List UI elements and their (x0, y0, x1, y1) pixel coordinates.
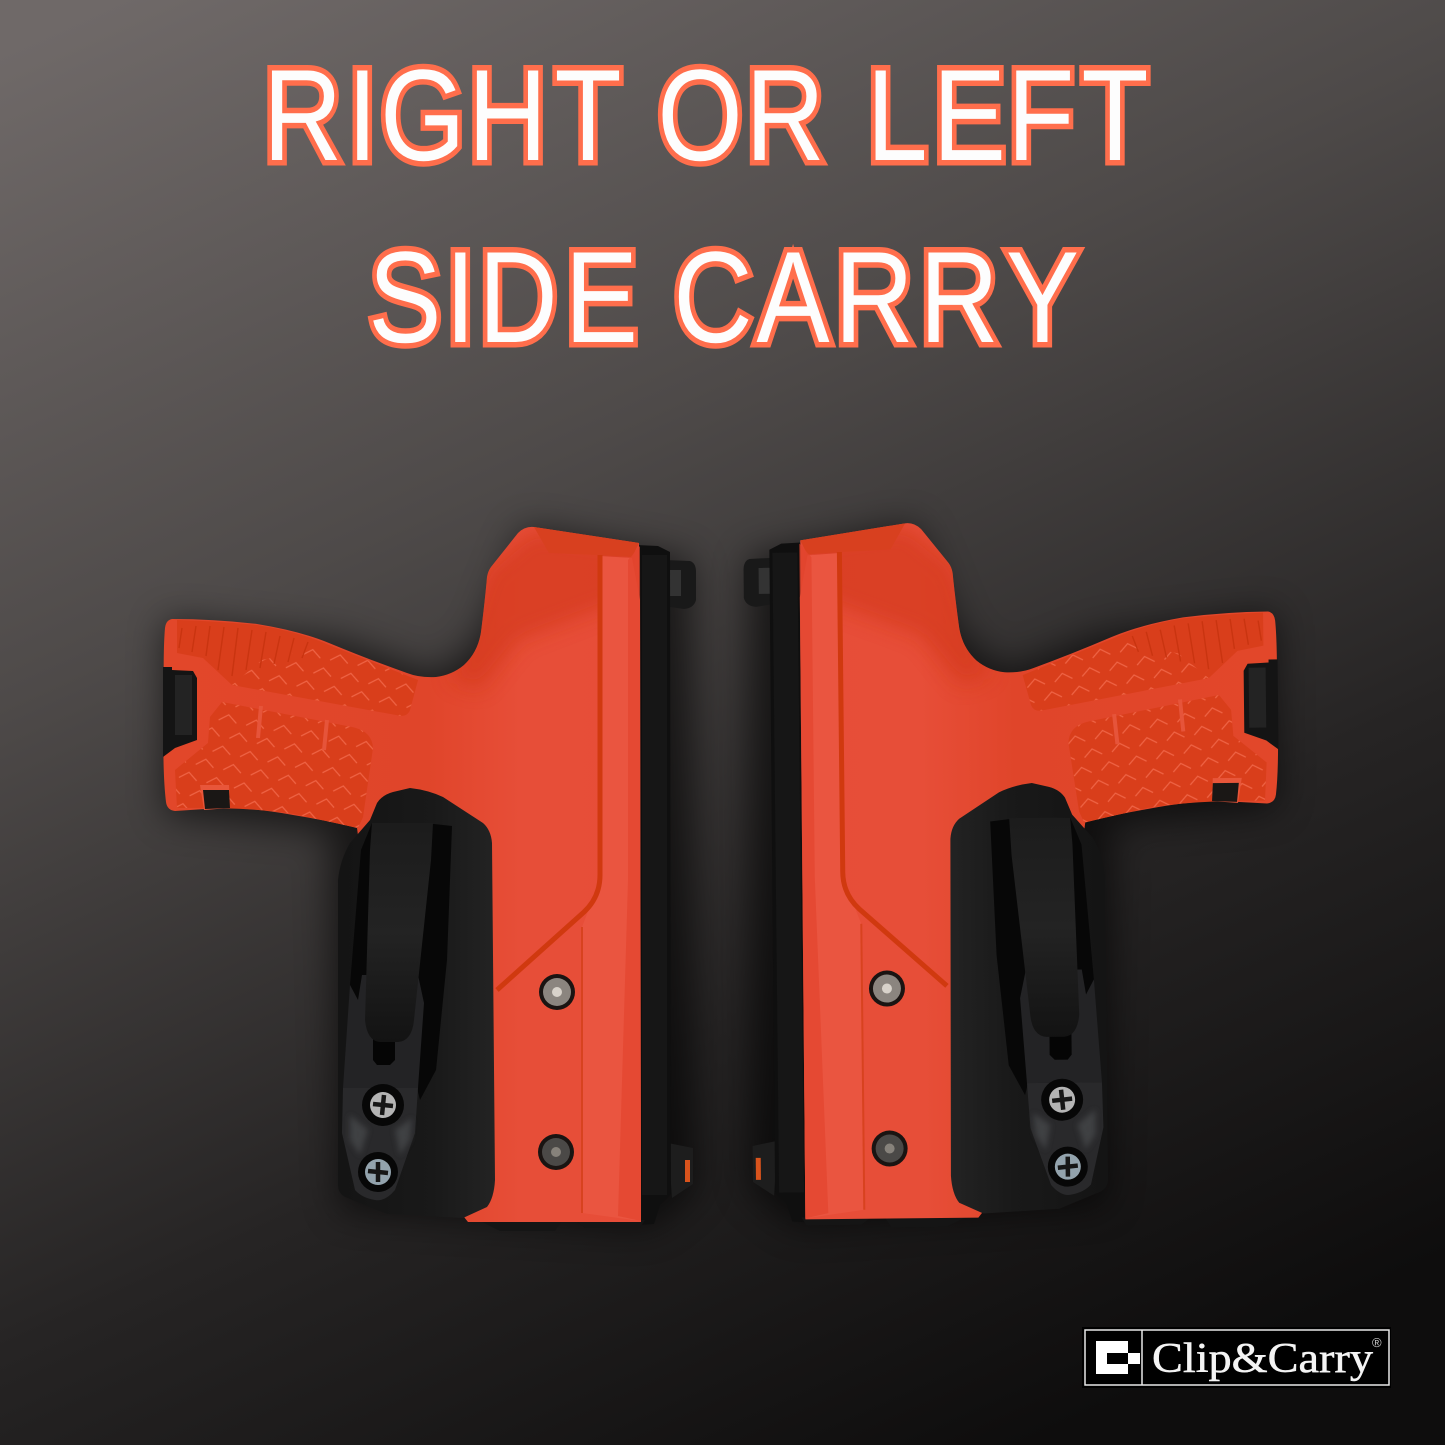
mounting plate (343, 975, 424, 1088)
soft shadow (165, 528, 696, 1228)
slide highlight (642, 555, 667, 1195)
raised side strip (582, 556, 641, 1221)
plate teardrop (342, 1088, 418, 1200)
plate slot (373, 1035, 395, 1065)
logo (1082, 1327, 1391, 1388)
bottom muzzle ends (478, 1220, 645, 1231)
rear sight (668, 1143, 693, 1198)
logo mark (1096, 1341, 1140, 1374)
logo backing (1082, 1327, 1391, 1388)
front sight highlight (668, 570, 681, 596)
magazine release face (175, 675, 192, 735)
orange pistol frame (163, 527, 641, 1222)
front sight (664, 560, 696, 609)
upper frame bolt (539, 974, 575, 1010)
upper body shade (450, 530, 639, 690)
top bevel (534, 527, 639, 557)
black slide (620, 545, 671, 1226)
belt clip (365, 823, 433, 1042)
magazine release (163, 667, 197, 757)
upper grip chevrons (232, 645, 418, 716)
logo wordmark: Clip&Carry (1152, 1336, 1373, 1382)
logo frame (1085, 1330, 1389, 1385)
upper grip panel (177, 620, 418, 716)
lower holster screw (358, 1152, 398, 1192)
right holstered pistol (mirrored) (743, 519, 1283, 1229)
lanyard slot (203, 790, 230, 809)
holster shell (338, 788, 495, 1218)
holster channel (350, 823, 452, 1100)
frame groove (497, 555, 600, 990)
sight insert (685, 1160, 690, 1182)
logo divider (1141, 1330, 1143, 1385)
grip grooves (258, 706, 327, 750)
upper grip ticks (179, 626, 308, 676)
title line two: SIDE CARRY (368, 224, 1079, 370)
lower grip chevrons (175, 702, 373, 828)
registered mark: ® (1372, 1335, 1382, 1350)
upper holster screw (362, 1084, 404, 1126)
lower frame bolt (538, 1134, 574, 1170)
lower frame groove (581, 927, 583, 1213)
lower grip panel (175, 702, 373, 828)
title (263, 42, 1149, 370)
plate highlights (350, 1115, 412, 1155)
lanyard notch (200, 785, 230, 810)
left holstered pistol (163, 527, 696, 1231)
right edge shade (618, 546, 641, 1221)
title line one: RIGHT OR LEFT (263, 42, 1149, 188)
